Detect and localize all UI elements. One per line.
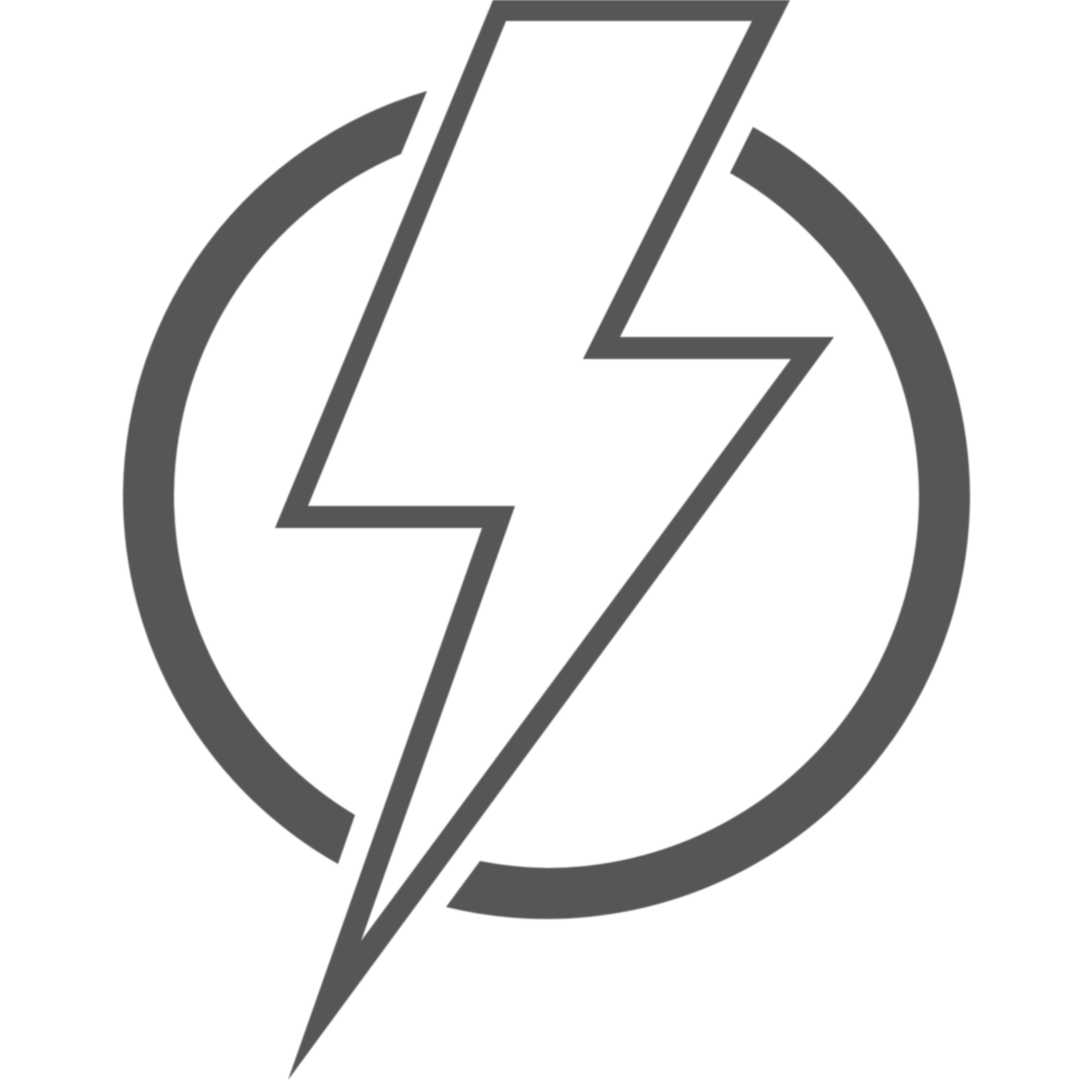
icon: left arc of circle: [123, 91, 427, 864]
icon: lightning bolt outline: [275, 0, 834, 1080]
icon: right arc of circle: [446, 127, 970, 919]
